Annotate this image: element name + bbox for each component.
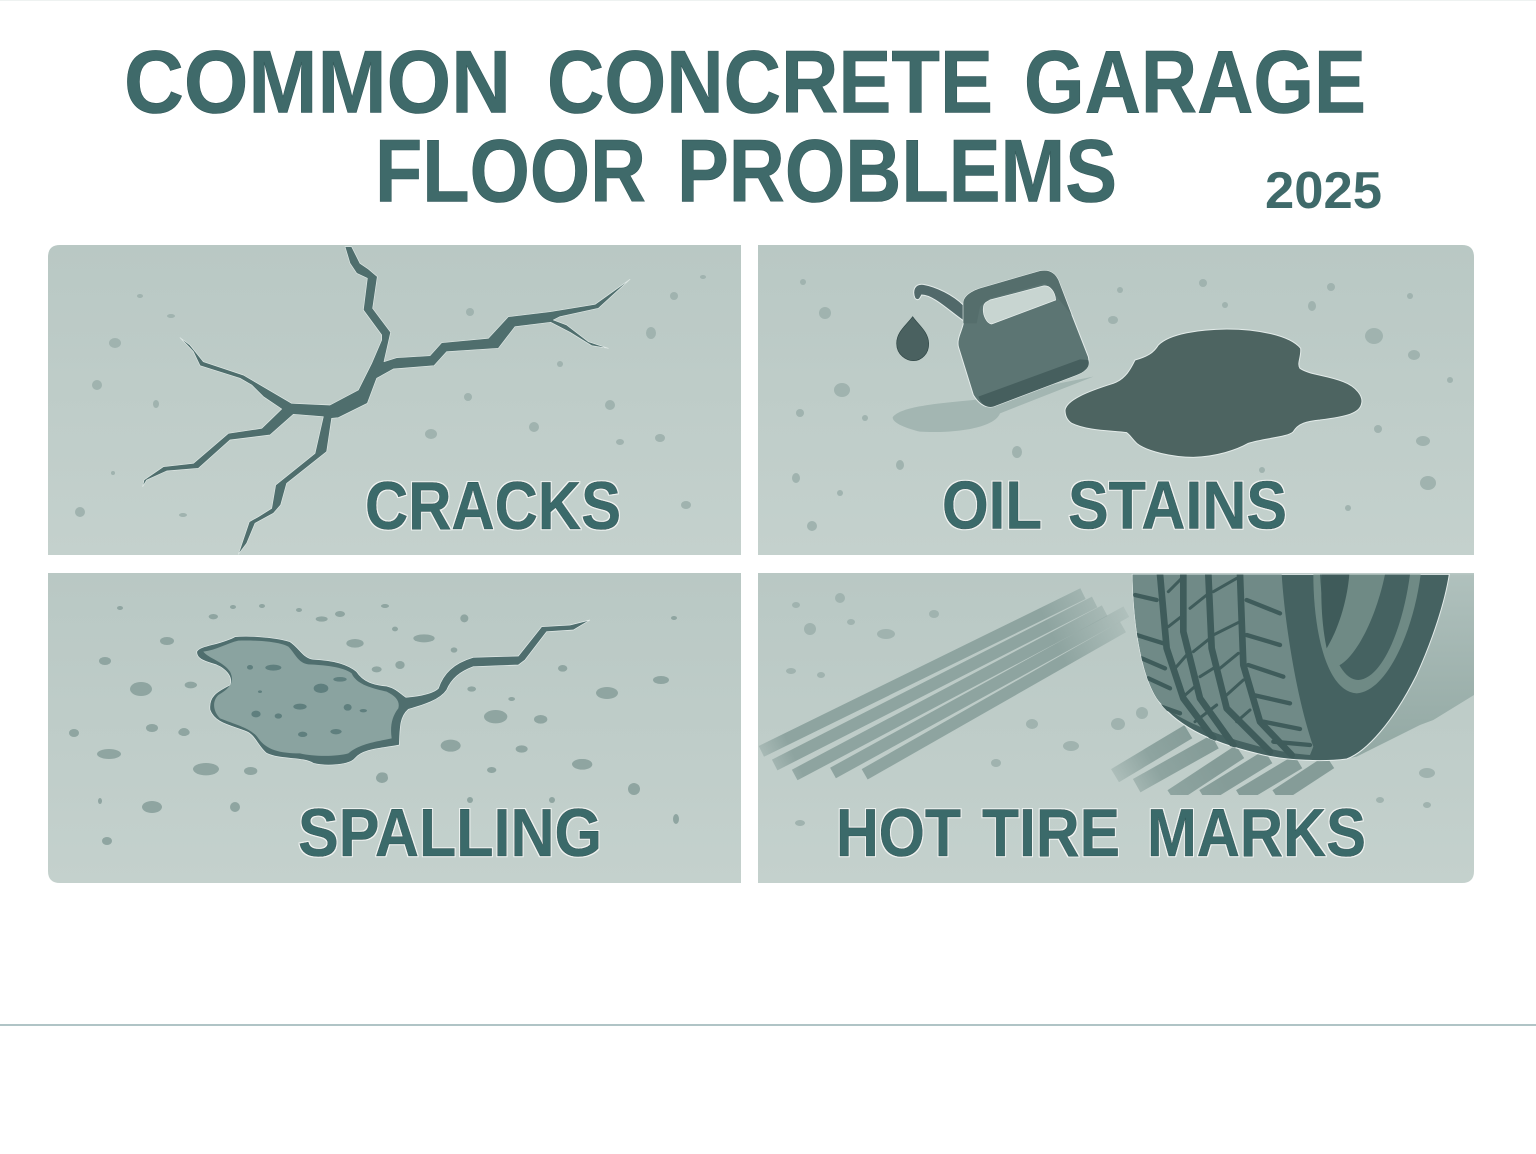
tire shadow [1340,574,1474,760]
title: COMMON [124,32,511,132]
label: spalling: SPALLING [298,795,602,871]
panel: spalling [48,573,741,883]
pits inside patch [247,665,367,737]
oil puddle [1065,329,1362,457]
concrete speckles: oil stains [792,279,1453,531]
title: PROBLEMS [677,121,1117,221]
tire body [1132,574,1449,761]
tire tracks: under tire [1115,732,1330,797]
title: FLOOR [375,121,646,221]
oil can spout [914,284,963,321]
tread grooves [1160,574,1292,755]
cracks illustration [143,247,630,554]
sidewall ring [1313,574,1421,693]
oil can body [958,271,1089,407]
panel background: spalling [48,573,741,883]
oil can handle opening [983,286,1056,324]
label: hot tire marks: HOT [836,795,961,871]
tread blocks [1132,574,1313,755]
concrete speckles: cracks [75,275,706,517]
panel: hot tire marks [758,573,1474,883]
spalled patch edge and crack [197,620,590,765]
label: hot tire marks [836,795,1366,871]
label: oil stains [942,468,1287,544]
footer rule [0,1024,1536,1026]
tire illustration [1132,574,1449,761]
label: oil stains: STAINS [1068,468,1287,544]
title [124,32,1366,221]
label: hot tire marks: TIRE [982,795,1120,871]
label: hot tire marks: MARKS [1147,795,1366,871]
tire tracks: long [761,594,1126,775]
oil can upper shade [963,271,1072,323]
top hairline [0,0,1536,1]
label: cracks: CRACKS [365,468,621,544]
oil can base shade [978,359,1089,407]
oil can and puddle illustration [893,271,1362,457]
panel background: oil stains [758,245,1474,555]
can shadow [893,377,1093,432]
panel: oil stains [758,245,1474,555]
surrounding pits [178,614,601,780]
title: CONCRETE [547,32,993,132]
spalling patch and crack illustration [178,614,601,780]
spalled patch fill [203,641,399,756]
panel background: hot tire marks [758,573,1474,883]
year label: 2025 [1265,162,1382,220]
oil drop [897,317,929,361]
title: GARAGE [1024,32,1366,132]
concrete speckles: spalling [69,604,679,845]
panel: cracks [48,245,741,555]
label: oil stains: OIL [942,468,1042,544]
panel background: cracks [48,245,741,555]
concrete speckles: hot tire marks [786,593,1435,826]
